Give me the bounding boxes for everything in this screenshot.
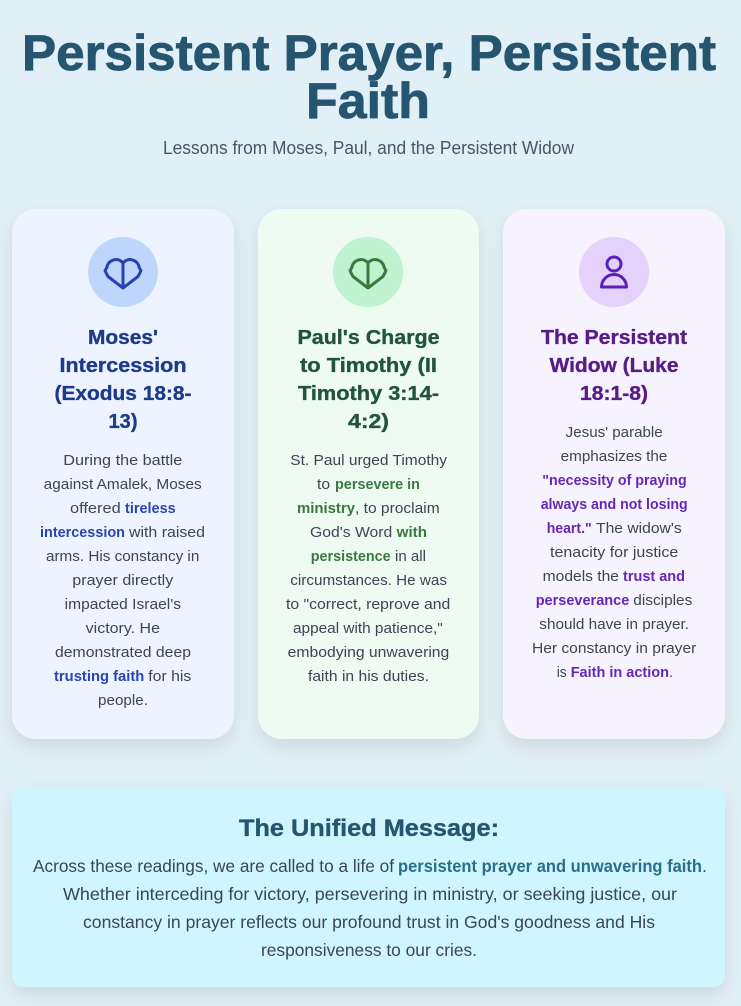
body text: . (702, 856, 707, 876)
body text: heart." (547, 520, 592, 537)
body text: people. (98, 692, 148, 709)
body text: in all (395, 548, 426, 565)
card background (258, 209, 479, 739)
body text: prayer directly (72, 572, 174, 589)
body text: appeal with patience," (293, 620, 443, 637)
body text: . (669, 664, 673, 681)
body text: "necessity of praying (542, 472, 687, 489)
heading (541, 327, 687, 405)
body text: faith in his duties. (308, 668, 429, 685)
panel: Paul (258, 209, 479, 739)
panel: Persistent Widow (503, 209, 725, 739)
title: Persistent Prayer, Persistent (22, 25, 716, 81)
body text (33, 856, 707, 960)
body text: for his (148, 668, 191, 685)
card background (12, 209, 234, 739)
heading: The Persistent (541, 327, 687, 349)
heading: (Exodus 18:8- (54, 383, 192, 405)
body text: victory. He (86, 620, 160, 637)
body text: The widow's (596, 520, 682, 537)
body text: to "correct, reprove and (286, 596, 450, 613)
title: Faith (306, 73, 430, 129)
title (22, 25, 716, 129)
heading: to Timothy (II (300, 355, 437, 377)
body text: Across these readings, we are called to a life of (33, 856, 394, 876)
panel: The Unified Message (12, 787, 725, 987)
body text: God's Word (310, 524, 392, 541)
body text: trust and (623, 568, 685, 585)
body text: trusting faith (54, 668, 144, 685)
body text: circumstances. He was (290, 572, 447, 589)
icon: book heart (88, 237, 158, 307)
body text: Her constancy in prayer (532, 640, 696, 657)
body text: intercession (40, 524, 125, 541)
body text: against Amalek, Moses (44, 476, 202, 493)
body text: , to proclaim (355, 500, 440, 517)
icon: person (579, 237, 649, 307)
body text: persistence (311, 548, 391, 565)
card background (503, 209, 725, 739)
body text: embodying unwavering (288, 644, 449, 661)
body text: persistent prayer and unwavering faith (398, 856, 702, 876)
body text: with (396, 524, 427, 541)
body text (40, 452, 205, 709)
subtitle: Lessons from Moses, Paul, and the Persistent Widow (163, 138, 575, 158)
body text: persevere in (335, 476, 420, 493)
body text: models the (543, 568, 619, 585)
heading: The Unified Message: (239, 815, 499, 842)
heading (298, 327, 440, 433)
heading: 13) (108, 411, 138, 433)
body text: to (317, 476, 330, 493)
body text: emphasizes the (561, 448, 667, 465)
heading: 4:2) (348, 411, 389, 433)
body text: disciples (633, 592, 692, 609)
body text: demonstrated deep (55, 644, 191, 661)
body text: is (557, 664, 567, 681)
body text (532, 424, 696, 681)
body text: perseverance (536, 592, 629, 609)
body text: ministry (297, 500, 356, 517)
panel: Moses (12, 209, 234, 739)
heading: Intercession (60, 355, 186, 377)
body text: arms. His constancy in (46, 548, 199, 565)
body text: responsiveness to our cries. (261, 940, 477, 960)
body text: Whether interceding for victory, persevering in ministry, or seeking justice, our (63, 884, 677, 904)
body text: with raised (128, 524, 205, 541)
body text (286, 452, 450, 685)
heading (54, 327, 192, 433)
body text: St. Paul urged Timothy (290, 452, 448, 469)
box background (12, 787, 725, 987)
heading: Paul's Charge (298, 327, 440, 349)
body text: should have in prayer. (539, 616, 689, 633)
body text: Faith in action (571, 664, 669, 681)
body text: always and not losing (541, 496, 688, 513)
body text: constancy in prayer reflects our profound trust in God's goodness and His (83, 912, 655, 932)
heading: Widow (Luke (550, 355, 678, 377)
body text: tireless (125, 500, 176, 517)
body text: During the battle (63, 452, 182, 469)
heading: Timothy 3:14- (298, 383, 439, 405)
heading: 18:1-8) (580, 383, 648, 405)
icon: book heart (333, 237, 403, 307)
body text: tenacity for justice (550, 544, 678, 561)
body text: impacted Israel's (65, 596, 181, 613)
body text: offered (70, 500, 121, 517)
heading: Moses' (88, 327, 158, 349)
body text: Jesus' parable (566, 424, 663, 441)
